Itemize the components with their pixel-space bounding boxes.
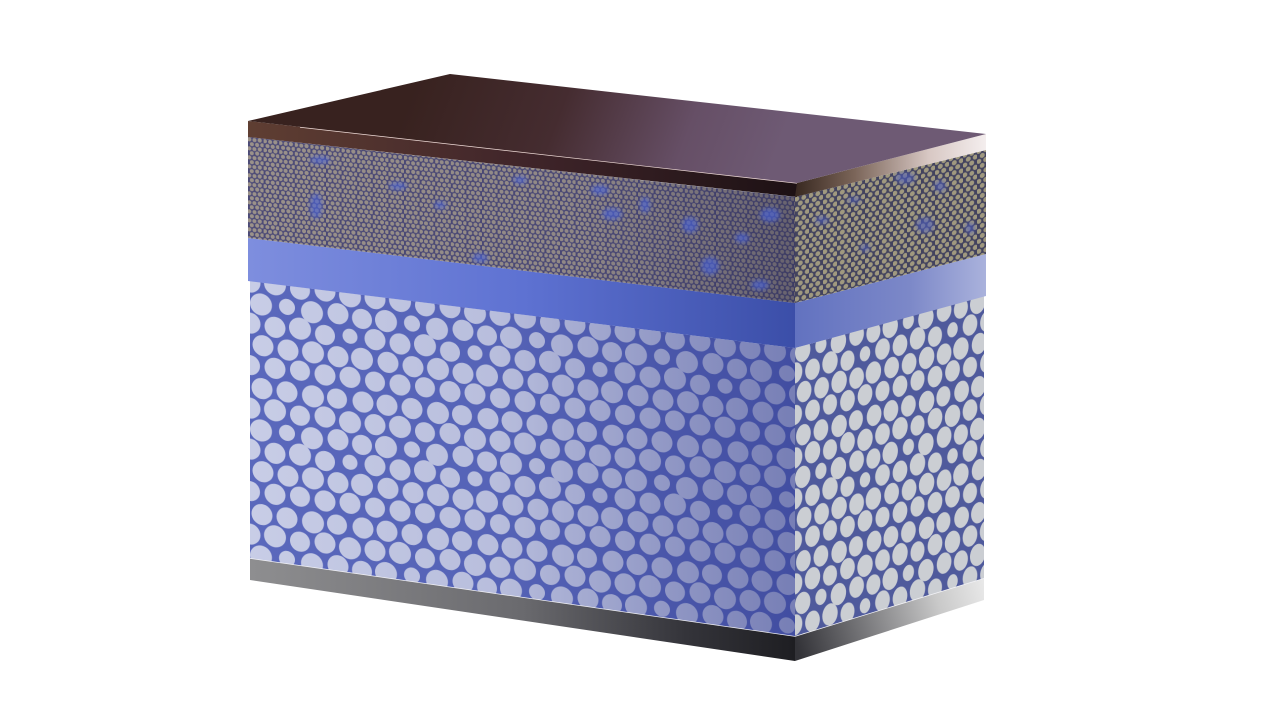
layered block illustration <box>248 74 986 661</box>
bead layer: right face <box>795 150 986 303</box>
bottom metal layer <box>250 558 984 661</box>
blue interlayer <box>248 238 986 348</box>
fibre layer: front face <box>250 281 795 636</box>
bead layer: front face <box>248 137 795 303</box>
copper top plate: upper surface <box>248 74 986 183</box>
copper top plate: edges <box>248 121 986 197</box>
fibre layer: right face <box>795 296 984 636</box>
